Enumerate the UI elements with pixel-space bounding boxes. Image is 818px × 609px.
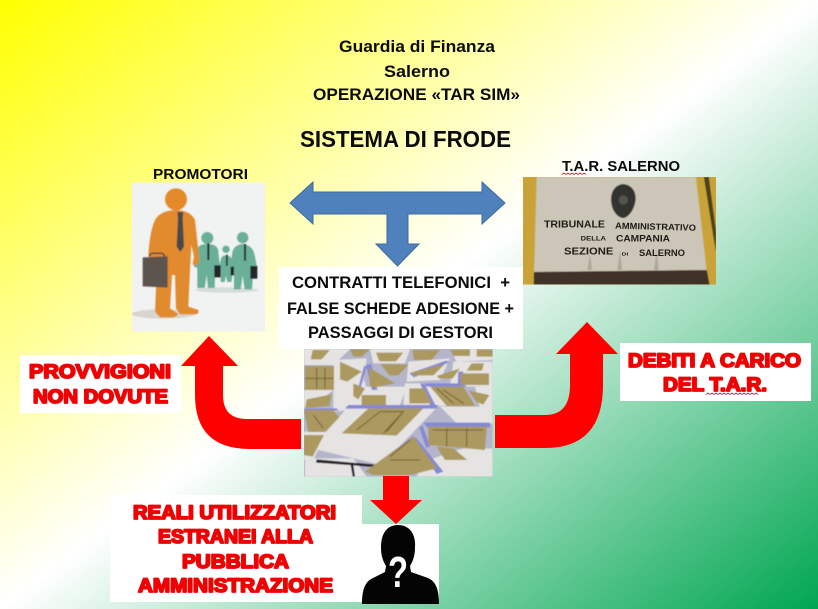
image: T.A.R. plaque photo: SALERNO — [639, 248, 685, 258]
callout: reali utilizzatori: PUBBLICA — [182, 552, 289, 573]
text box: contratti telefonici: PASSAGGI DI GESTORI — [308, 323, 493, 342]
image: T.A.R. plaque photo — [523, 177, 716, 285]
arrow: red curved arrow to promotori — [181, 336, 301, 449]
arrow: red curved arrow to T.A.R. — [495, 322, 618, 448]
image: SIM cards photo — [304, 349, 493, 477]
callout: provvigioni non dovute: NON DOVUTE — [33, 387, 168, 408]
label: T.A.R. Salerno: T.A.R. SALERNO — [562, 159, 680, 175]
orange figure — [165, 188, 187, 210]
teal figures — [194, 232, 257, 289]
blue card edges — [304, 361, 490, 474]
callout: debiti a carico del T.A.R. — [620, 343, 811, 401]
image: promotori figures — [132, 182, 265, 332]
icon: anonymous person: ? — [388, 548, 408, 597]
callout: debiti a carico del T.A.R.: DEL T.A.R. — [663, 375, 767, 396]
gold chips — [304, 349, 493, 475]
text box: contratti telefonici: CONTRATTI TELEFONICI + — [292, 273, 510, 292]
callout: provvigioni non dovute — [20, 355, 181, 413]
callout: reali utilizzatori — [110, 495, 362, 602]
image: T.A.R. plaque photo: DI — [622, 251, 629, 257]
callout: reali utilizzatori: ESTRANEI ALLA — [158, 527, 313, 548]
text box: contratti telefonici: FALSE SCHEDE ADESIONE + — [287, 299, 514, 318]
label: promotori: PROMOTORI — [153, 167, 248, 183]
emblem — [611, 184, 636, 218]
image: T.A.R. plaque photo: DELLA — [581, 236, 607, 243]
callout: reali utilizzatori: AMMINISTRAZIONE — [138, 576, 333, 597]
callout: debiti a carico del T.A.R.: DEBITI A CARICO — [628, 351, 801, 372]
image: T.A.R. plaque photo: SEZIONE — [564, 247, 614, 258]
briefcase — [149, 253, 165, 257]
title: Guardia di Finanza — [339, 37, 496, 56]
image: T.A.R. plaque photo: CAMPANIA — [616, 234, 671, 244]
heading: sistema di frode: SISTEMA DI FRODE — [300, 126, 511, 152]
image: T.A.R. plaque photo: AMMINISTRATIVO — [615, 221, 696, 233]
text box: contratti telefonici — [279, 267, 523, 349]
callout: reali utilizzatori: REALI UTILIZZATORI — [133, 503, 336, 524]
title: OPERAZIONE «TAR SIM» — [313, 85, 520, 104]
arrow: blue T-shaped double arrow — [290, 182, 505, 266]
white card bodies — [304, 349, 493, 477]
image: T.A.R. plaque photo: TRIBUNALE — [544, 219, 606, 230]
title: Salerno — [384, 62, 450, 81]
arrow: red down arrow — [370, 476, 422, 524]
icon: anonymous person — [362, 524, 439, 604]
title — [313, 37, 520, 104]
callout: provvigioni non dovute: PROVVIGIONI — [29, 362, 171, 383]
